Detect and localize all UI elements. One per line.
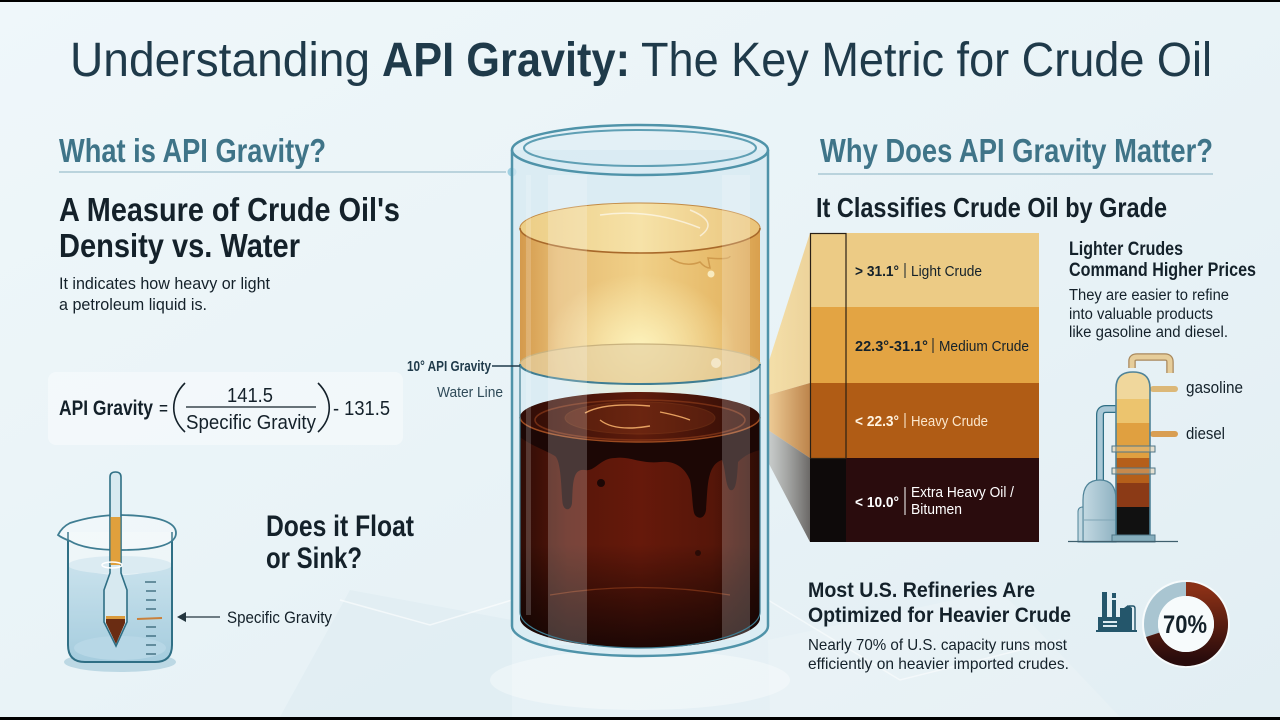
grade: medium crude: 22.3°-31.1° — [855, 338, 928, 355]
grade: extra heavy oil — [810, 458, 1039, 542]
text: lighter crudes command higher prices — [1069, 239, 1256, 341]
text: refineries optimized for heavier crude: Optimized for Heavier Crude — [808, 604, 1071, 627]
grade: light crude: Light Crude — [911, 263, 982, 280]
title: The Key Metric for Crude Oil — [641, 34, 1212, 87]
subheading: density vs water: A Measure of Crude Oil's — [59, 191, 400, 228]
chart: crude oil grade scale — [810, 233, 1039, 542]
grade: extra heavy oil: Extra Heavy Oil / — [911, 484, 1015, 501]
grade: medium crude — [810, 307, 1039, 383]
formula panel: Specific Gravity — [186, 412, 316, 434]
light crude layer — [520, 203, 760, 410]
formula panel: API Gravity — [59, 397, 153, 420]
labels: gasoline and diesel — [1186, 378, 1243, 443]
title — [70, 34, 1212, 87]
grade: extra heavy oil: Bitumen — [911, 501, 962, 518]
arrow: specific gravity — [177, 612, 220, 622]
funnel from cylinder to grade chart — [768, 233, 810, 542]
dark crude layer — [520, 392, 760, 648]
text: refineries optimized for heavier crude — [808, 579, 1071, 673]
label: 10 degree API gravity water line: 10° API Gravity — [407, 359, 491, 375]
formula panel — [48, 372, 403, 445]
formula panel: - 131.5 — [333, 398, 390, 420]
text: refineries optimized for heavier crude: Most U.S. Refineries Are — [808, 579, 1035, 602]
central cylinder — [512, 125, 768, 656]
icon: refinery column — [1068, 357, 1178, 542]
heading: does it float or sink — [266, 510, 414, 575]
text: lighter crudes command higher prices: They are easier to refine — [1069, 287, 1229, 304]
description text: It indicates how heavy or light — [59, 274, 270, 293]
labels: gasoline and diesel: diesel — [1186, 424, 1225, 443]
label: 10 degree API gravity water line — [407, 359, 520, 401]
left heading: what is API gravity — [59, 132, 516, 176]
grade: heavy crude — [810, 383, 1039, 458]
formula panel: 141.5 — [227, 385, 273, 407]
glass highlights — [526, 175, 750, 645]
text: lighter crudes command higher prices: like gasoline and diesel. — [1069, 324, 1228, 341]
formula panel: = — [159, 398, 168, 420]
grade: light crude — [810, 233, 1039, 307]
grade: heavy crude: Heavy Crude — [911, 413, 988, 430]
hydrometer — [104, 472, 127, 646]
description text — [59, 274, 270, 314]
label: specific gravity: Specific Gravity — [227, 608, 332, 627]
glass outline — [512, 125, 768, 656]
description text: a petroleum liquid is. — [59, 295, 207, 314]
label: 10 degree API gravity water line: Water Line — [437, 385, 503, 401]
text: lighter crudes command higher prices: Lighter Crudes — [1069, 239, 1183, 260]
text: refineries optimized for heavier crude: efficiently on heavier imported crudes. — [808, 656, 1069, 673]
title: API Gravity: — [382, 34, 630, 87]
text: refineries optimized for heavier crude: Nearly 70% of U.S. capacity runs most — [808, 637, 1068, 654]
heading: does it float or sink: or Sink? — [266, 542, 362, 575]
labels: gasoline and diesel: gasoline — [1186, 378, 1243, 397]
subheading: classifies by grade: It Classifies Crude Oil by Grade — [816, 192, 1167, 223]
donut chart: 70 percent — [1142, 580, 1230, 668]
donut chart: 70 percent: 70% — [1163, 611, 1207, 639]
grade: heavy crude: < 22.3° — [855, 413, 899, 430]
title: Understanding — [70, 34, 370, 87]
heading: does it float or sink: Does it Float — [266, 510, 414, 543]
icon: beaker with hydrometer — [58, 472, 176, 672]
text: lighter crudes command higher prices: into valuable products — [1069, 306, 1213, 323]
grade: medium crude: Medium Crude — [939, 338, 1029, 355]
subheading: density vs water: Density vs. Water — [59, 227, 300, 264]
right heading: why it matters: Why Does API Gravity Matter? — [820, 132, 1213, 169]
left heading: what is API gravity: What is API Gravity? — [59, 132, 326, 169]
grade: light crude: > 31.1° — [855, 263, 899, 280]
subheading: density vs water — [59, 191, 400, 264]
icon: factory — [1096, 592, 1137, 632]
water line — [520, 344, 760, 384]
grade: extra heavy oil: < 10.0° — [855, 494, 899, 511]
